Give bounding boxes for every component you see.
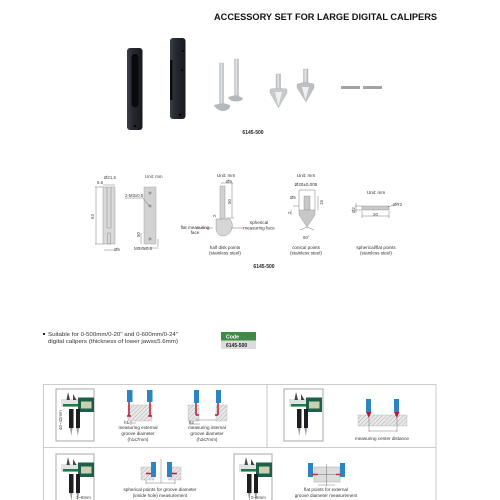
code table	[221, 332, 256, 349]
diagram: spherical points for groove diameter: (inside hole) measurement	[133, 493, 188, 498]
drawing: extension rod dimensions: 2-M3x0.5	[125, 193, 144, 198]
photo: half disk points	[214, 59, 243, 111]
drawing: conical points: Unit: mm	[297, 173, 315, 178]
drawing: half disk points: Ø9	[226, 179, 232, 184]
product code: drawings: 6145-500	[253, 264, 275, 270]
drawing: conical points: Ø20±0.005	[295, 182, 318, 187]
drawing: conical points: Ø5	[290, 195, 296, 200]
diagram: flat points for external groove diameter: flat points for external	[304, 487, 348, 492]
usage panel frame	[44, 384, 436, 500]
drawing: half disk points: Unit: mm	[217, 173, 235, 178]
code table: 6145-500	[226, 343, 247, 349]
diagram: measuring internal groove diameter: measuring internal	[188, 425, 226, 430]
photo: spherical and flat points	[341, 86, 382, 89]
caliper photo 4	[234, 454, 272, 500]
drawing: extension rod dimensions: 5.6	[97, 180, 104, 185]
diagram: measuring internal groove diameter: (h2≤7mm)	[197, 437, 218, 442]
photo: black extension rods	[127, 38, 186, 130]
diagram: measuring external groove diameter	[118, 390, 158, 442]
title: ACCESSORY SET FOR LARGE DIGITAL CALIPERS	[214, 12, 437, 22]
diagram: measuring internal groove diameter: groove diameter	[190, 431, 224, 436]
photo: conical points	[270, 69, 314, 108]
diagram: measuring external groove diameter: groove diameter	[121, 431, 155, 436]
drawing: extension rod dimensions: M3.0x0.5	[134, 246, 153, 251]
caliper photo 3	[56, 454, 94, 500]
drawing: conical points	[287, 173, 324, 256]
product code: photo: 6145-500	[242, 130, 264, 136]
diagram: spherical points for groove diameter	[123, 459, 197, 498]
bullet note	[43, 332, 178, 345]
diagram: measuring external groove diameter: measuring external	[118, 425, 158, 430]
drawing: half disk points: measuring face	[243, 226, 275, 230]
code table: Code	[226, 334, 239, 340]
diagram: flat points for external groove diameter: groove diameter measurement	[295, 493, 358, 498]
caliper photo 1: 40~42mm	[58, 410, 63, 430]
diagram: measuring center distance	[355, 399, 409, 441]
drawing: half disk points: half disk points	[210, 245, 241, 250]
drawing: half disk points: face	[191, 230, 200, 235]
caliper photo 4: 0~6mm	[251, 495, 266, 500]
diagram: spherical points for groove diameter: spherical points for groove diameter	[123, 487, 197, 492]
drawing: half disk points: (stainless steel)	[209, 250, 241, 256]
drawing: spherical and flat points: Ø2	[351, 207, 356, 213]
drawing: extension rod dimensions: Ø5	[114, 247, 120, 252]
drawing: spherical and flat points: 20	[373, 212, 378, 217]
diagram: measuring internal groove diameter: h2	[189, 420, 194, 425]
drawing: half disk points: 50	[227, 199, 232, 204]
drawing: spherical and flat points: ØR2	[393, 202, 403, 207]
diagram: measuring external groove diameter: (h1≤7mm)	[128, 437, 149, 442]
drawing: spherical and flat points: spherical/flat points	[356, 245, 396, 250]
drawing: conical points: (stainless steel)	[290, 250, 322, 256]
drawing: half disk points: spherical	[250, 220, 268, 225]
drawing: extension rod dimensions	[90, 174, 163, 252]
drawing: extension rod dimensions: 50	[136, 232, 141, 237]
diagram: measuring center distance: measuring center distance	[355, 436, 409, 441]
drawing: spherical and flat points	[351, 190, 403, 256]
diagram: measuring external groove diameter: h1	[124, 420, 129, 425]
drawing: conical points: conical points	[292, 245, 321, 250]
drawing: extension rod dimensions: 63	[90, 214, 95, 219]
bullet note: digital calipers (thickness of lower jaws≤5.6mm)	[48, 339, 178, 345]
diagram: measuring internal groove diameter	[188, 390, 227, 442]
caliper photo 2	[284, 389, 323, 441]
drawing: extension rod dimensions: Unit: mm	[145, 174, 163, 179]
drawing: half disk points: flat measuring	[181, 225, 210, 230]
drawing: half disk points: 2	[212, 214, 217, 217]
drawing: spherical and flat points: (stainless steel)	[360, 250, 392, 256]
diagram: flat points for external groove diameter	[295, 463, 358, 498]
drawing: half disk points	[181, 173, 275, 256]
caliper photo 3: 2~8mm	[76, 495, 91, 500]
drawing: spherical and flat points: Unit: mm	[367, 190, 385, 195]
bullet note: Suitable for 0-500mm/0-20" and 0-600mm/0-24"	[48, 332, 178, 338]
drawing: conical points: 2	[287, 211, 292, 214]
caliper photo 1	[56, 389, 94, 441]
drawing: extension rod dimensions: Ø21.5	[104, 175, 117, 180]
drawing: conical points: 15	[319, 200, 324, 205]
drawing: conical points: 60°	[303, 235, 310, 240]
